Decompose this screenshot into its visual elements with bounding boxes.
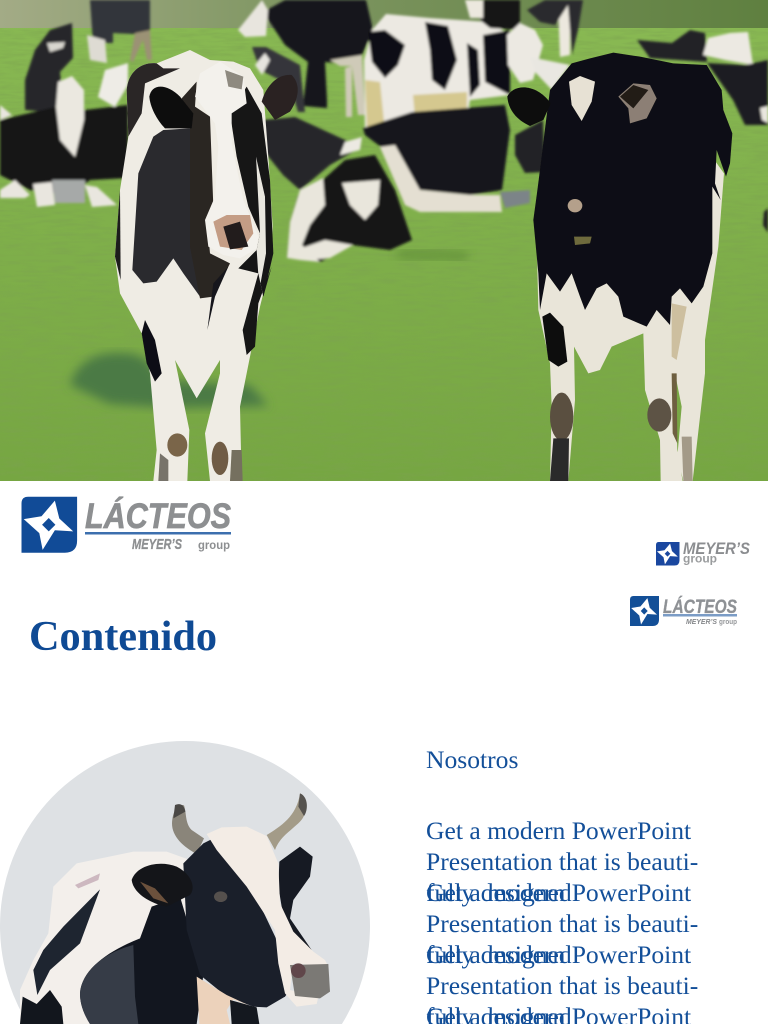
cow [20,793,330,1024]
illustration: cow in a grey circle [0,741,370,1024]
icon: blue square with white star [630,596,659,626]
text block: repeated overlapping paragraphs: Presentation that is beauti- [426,971,698,1000]
wordmark: group [198,538,230,552]
logo: Meyer's group, small [656,540,750,566]
wordmark: group [683,552,717,566]
left foreground cow [115,50,298,481]
logo: Lácteos Meyer's group, large [22,496,231,553]
wordmark: LÁCTEOS [85,497,231,536]
wordmark [683,540,750,566]
title: Contenido [29,613,217,660]
wordmark [663,595,737,626]
text block: repeated overlapping paragraphs: fully designed [426,878,572,907]
icon: blue square with white star [22,497,77,553]
text block: repeated overlapping paragraphs: fully designed [426,940,572,969]
right foreground cow [507,53,732,481]
text block: repeated overlapping paragraphs: Get a modern PowerPoint [426,940,691,969]
background herd [0,0,768,262]
wordmark: group [719,619,737,626]
wordmark: MEYER’S [132,536,182,553]
grey circle [0,741,370,1024]
logo: Lácteos Meyer's group, medium [630,595,737,626]
text block: repeated overlapping paragraphs: Presentation that is beauti- [426,909,698,938]
hero photo: cows in a green pasture [0,0,768,481]
text block: repeated overlapping paragraphs: Presentation that is beauti- [426,847,698,876]
wordmark: MEYER’S [686,617,717,626]
text block: repeated overlapping paragraphs [426,816,698,1024]
wordmark [85,497,231,553]
text block: repeated overlapping paragraphs: Get a modern PowerPoint [426,878,691,907]
text block: repeated overlapping paragraphs: Get a modern PowerPoint [426,816,691,845]
text: Nosotros: Nosotros [426,745,518,774]
icon: blue square with white star [656,542,680,566]
